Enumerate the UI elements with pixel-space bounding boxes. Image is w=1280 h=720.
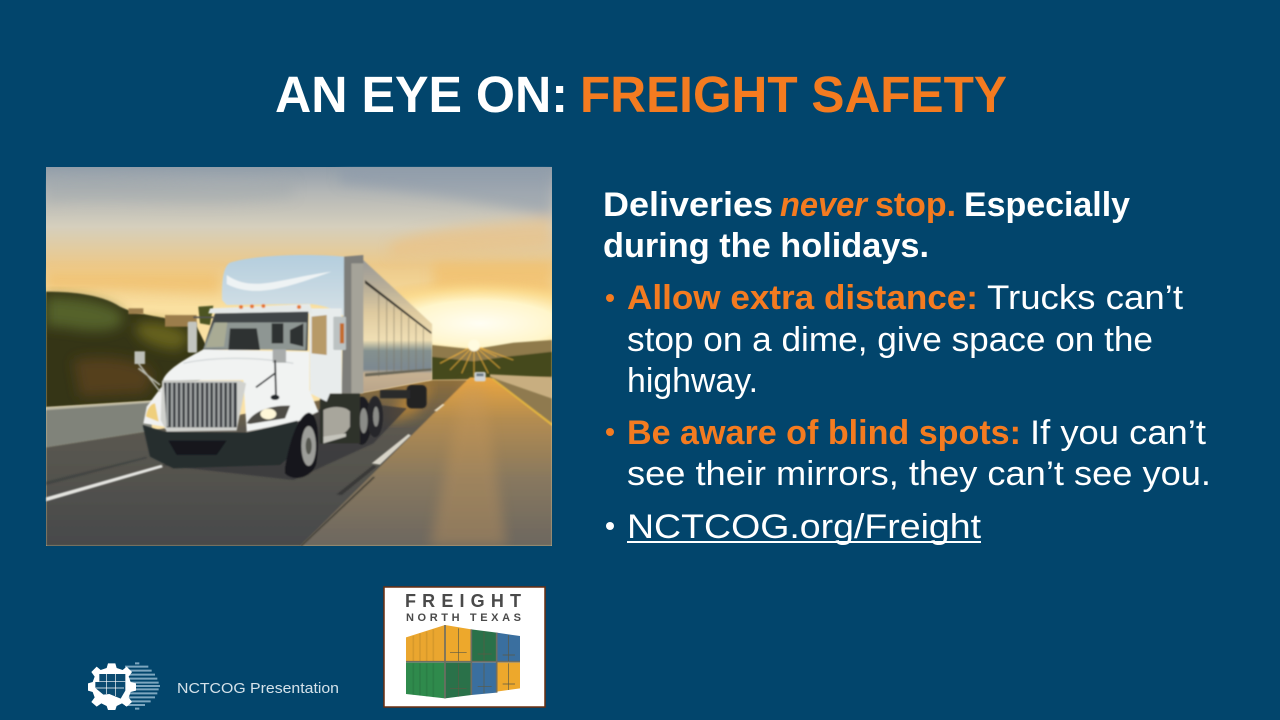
roadside trees <box>46 292 207 407</box>
title <box>275 66 1007 123</box>
containers <box>406 625 520 698</box>
logo: NCTCOG gear <box>88 663 160 710</box>
striped lines <box>125 663 160 709</box>
headlights <box>247 406 290 424</box>
cab fairing <box>222 255 344 317</box>
mirrors <box>188 322 197 353</box>
roof cap with marker lights <box>208 304 313 313</box>
trailer side <box>363 260 432 393</box>
heading text: stop. <box>875 186 956 224</box>
bumper <box>143 421 297 468</box>
rear wheels <box>359 396 370 445</box>
front wheel <box>285 413 318 478</box>
windshield <box>203 312 308 351</box>
concrete barrier left <box>46 401 152 447</box>
sun glow rays <box>440 345 513 377</box>
bullet: allow extra distance: Trucks can’t <box>987 279 1184 317</box>
logo: Freight North Texas: NORTH TEXAS <box>406 612 521 624</box>
road <box>46 380 472 546</box>
chassis and tank <box>320 393 360 443</box>
bullet: allow extra distance: stop on a dime, give space on the <box>627 321 1153 359</box>
bullet: allow extra distance: Allow extra distance: <box>627 279 978 317</box>
logo: Freight North Texas: FREIGHT <box>405 591 521 611</box>
heading text: never <box>780 186 869 224</box>
bullet: blind spots: Be aware of blind spots: <box>627 414 1021 452</box>
logo: Freight North Texas <box>384 587 545 707</box>
gear <box>88 663 136 710</box>
heading text: Deliveries <box>603 186 773 224</box>
footer label: NCTCOG Presentation <box>177 680 339 697</box>
photo: white semi truck on highway at sunset <box>46 166 552 546</box>
distant car <box>474 372 486 381</box>
bullet: allow extra distance: highway. <box>627 362 758 400</box>
map <box>95 674 125 699</box>
title: FREIGHT SAFETY <box>580 66 1007 123</box>
cab body <box>309 308 342 402</box>
hood and fender <box>163 349 318 432</box>
bullet: blind spots: see their mirrors, they can’t see you. <box>627 455 1211 493</box>
heading text: during the holidays. <box>603 227 929 265</box>
distant hills <box>432 340 552 380</box>
right shoulder and barrier <box>490 377 552 425</box>
bullet: allow extra distance <box>606 279 1184 400</box>
bullet: link: NCTCOG.org/Freight <box>627 508 982 546</box>
title: AN EYE ON: <box>275 66 568 123</box>
bullet: blind spots <box>606 414 1211 493</box>
bullet: blind spots: If you can’t <box>1030 414 1207 452</box>
lane markings <box>46 465 163 501</box>
grille <box>161 381 246 432</box>
heading text <box>603 186 1130 265</box>
truck shadow <box>160 400 407 480</box>
trailer front <box>342 255 363 393</box>
heading text: Especially <box>964 186 1130 224</box>
